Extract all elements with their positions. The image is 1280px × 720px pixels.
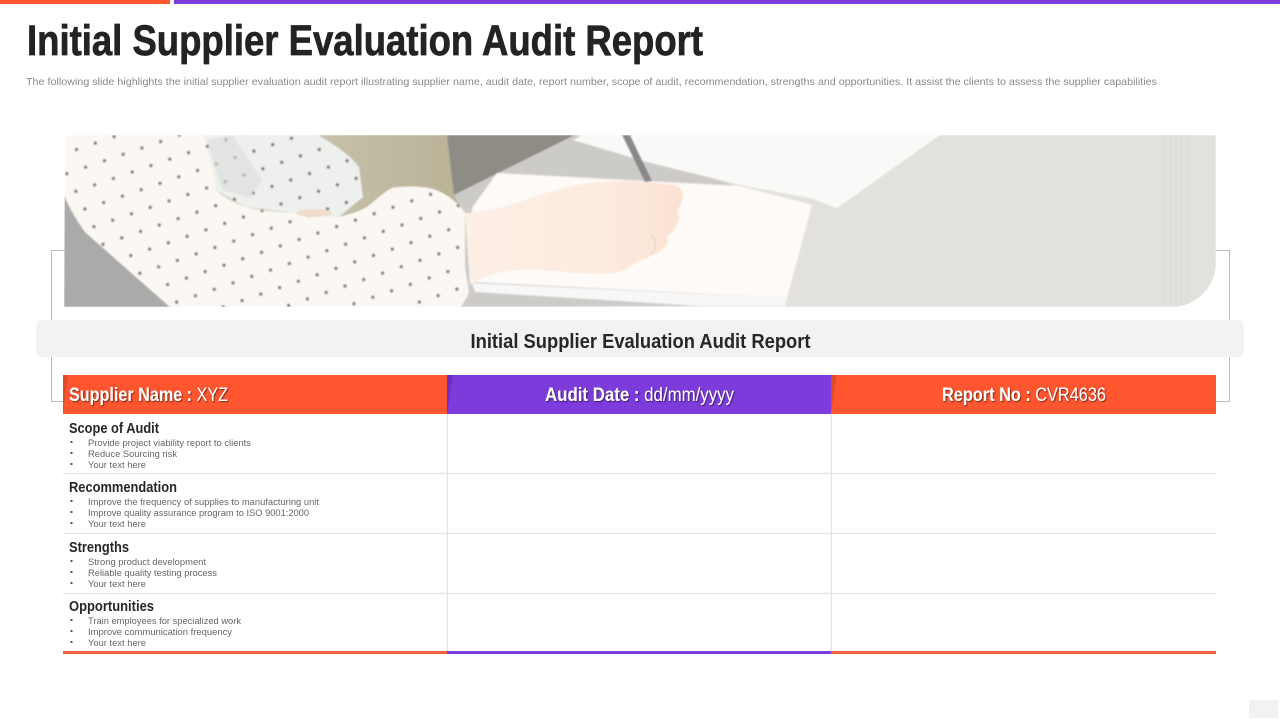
row: strengths xyxy=(69,540,217,590)
row: recommendation: Your text here xyxy=(88,519,146,530)
back sleeve xyxy=(204,135,363,217)
row: scope of audit xyxy=(69,421,251,471)
hand xyxy=(465,181,683,285)
table bottom border xyxy=(63,651,1216,654)
row: recommendation xyxy=(69,480,319,530)
banner with table heading: Initial Supplier Evaluation Audit Report xyxy=(470,331,811,353)
row: scope of audit: Scope of Audit xyxy=(69,421,159,437)
row: recommendation: Improve the frequency of supplies to manufacturing unit xyxy=(88,497,319,508)
table header: report number: Report No : CVR4636 xyxy=(942,385,1106,406)
table header: audit date: Audit Date : dd/mm/yyyy xyxy=(545,385,734,406)
row: strengths: Strong product development xyxy=(88,557,206,568)
table header: supplier name xyxy=(63,375,447,414)
row: opportunities: Opportunities xyxy=(69,599,154,615)
row: recommendation: Improve quality assurance program to ISO 9001:2000 xyxy=(88,508,309,519)
row: opportunities xyxy=(69,599,241,649)
row: opportunities: Your text here xyxy=(88,638,146,649)
row: recommendation: Recommendation xyxy=(69,480,177,496)
row: strengths: Your text here xyxy=(88,579,146,590)
table xyxy=(63,375,1216,654)
table header: supplier name: Supplier Name : XYZ xyxy=(69,385,228,406)
table header: report number xyxy=(831,375,1216,414)
faint vertical stripes near the right edge xyxy=(1164,135,1188,307)
page corner box xyxy=(1249,700,1278,718)
table header: audit date xyxy=(447,375,831,414)
row: scope of audit: Reduce Sourcing risk xyxy=(88,449,177,460)
row: opportunities: Improve communication frequency xyxy=(88,627,232,638)
subtitle description: The following slide highlights the initial supplier evaluation audit report illustrating supplier name, audit date, report number, scope of audit, recommendation, strengths and opportunities. It assist the clients to assess the supplier capabilities xyxy=(26,76,1157,88)
row: scope of audit: Your text here xyxy=(88,460,146,471)
table grid lines xyxy=(63,414,1216,652)
notebook xyxy=(472,173,812,298)
photo: hand writing on a notebook xyxy=(64,135,1216,307)
row: scope of audit: Provide project viability report to clients xyxy=(88,438,251,449)
top accent bar: orange xyxy=(0,0,170,4)
ring xyxy=(650,235,655,255)
title: Initial Supplier Evaluation Audit Report xyxy=(27,17,703,65)
front sleeve xyxy=(64,135,469,307)
row: strengths: Reliable quality testing process xyxy=(88,568,217,579)
row: strengths: Strengths xyxy=(69,540,129,556)
banner with table heading xyxy=(36,320,1244,357)
top accent bar: purple xyxy=(174,0,1280,4)
papers xyxy=(573,135,940,208)
pen xyxy=(622,135,652,182)
row: opportunities: Train employees for specialized work xyxy=(88,616,241,627)
outline frame behind the photo and table xyxy=(52,250,1230,402)
